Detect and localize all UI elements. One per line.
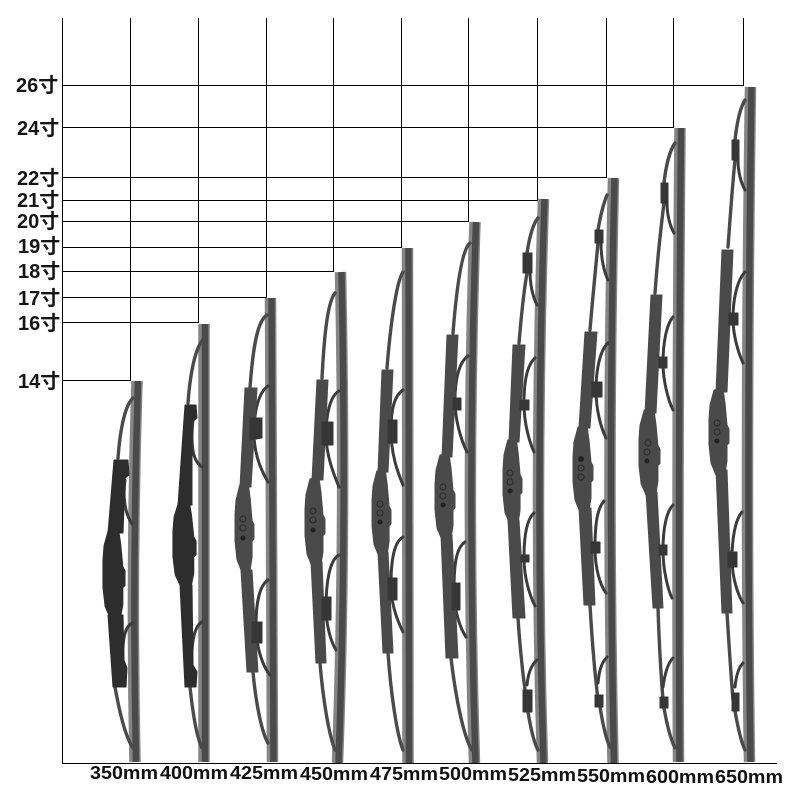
size labels in cun: 17寸 bbox=[18, 287, 60, 310]
length labels in mm: 450mm bbox=[300, 763, 368, 784]
length labels in mm: 425mm bbox=[230, 762, 298, 783]
size labels in cun bbox=[16, 74, 60, 393]
wiper blade 475mm bbox=[372, 248, 409, 763]
wiper blade 425mm bbox=[235, 298, 274, 762]
length labels in mm: 550mm bbox=[577, 765, 645, 786]
wiper blade 550mm bbox=[573, 178, 614, 763]
length labels in mm: 350mm bbox=[90, 762, 158, 783]
length labels in mm: 525mm bbox=[508, 764, 576, 785]
wiper blade 450mm bbox=[305, 272, 344, 763]
wiper blade 500mm bbox=[435, 222, 476, 763]
size labels in cun: 24寸 bbox=[17, 117, 59, 140]
wiper blade 400mm bbox=[173, 324, 205, 762]
size labels in cun: 18寸 bbox=[18, 260, 60, 283]
wiper blade 650mm bbox=[709, 87, 752, 762]
wiper blade 525mm bbox=[503, 199, 544, 763]
size labels in cun: 19寸 bbox=[18, 235, 60, 258]
length labels in mm: 500mm bbox=[439, 763, 507, 784]
size labels in cun: 21寸 bbox=[17, 189, 59, 212]
wiper blade 350mm bbox=[103, 381, 138, 762]
length labels in mm: 475mm bbox=[370, 763, 438, 784]
wiper blade 600mm bbox=[639, 128, 681, 762]
size labels in cun: 22寸 bbox=[17, 167, 59, 190]
size labels in cun: 14寸 bbox=[18, 370, 60, 393]
length labels in mm: 600mm bbox=[646, 766, 714, 787]
length labels in mm: 650mm bbox=[715, 766, 783, 787]
length labels in mm: 400mm bbox=[160, 762, 228, 783]
size labels in cun: 16寸 bbox=[18, 312, 60, 335]
length labels in mm bbox=[90, 762, 783, 787]
size labels in cun: 26寸 bbox=[16, 74, 58, 97]
size labels in cun: 20寸 bbox=[17, 210, 59, 233]
